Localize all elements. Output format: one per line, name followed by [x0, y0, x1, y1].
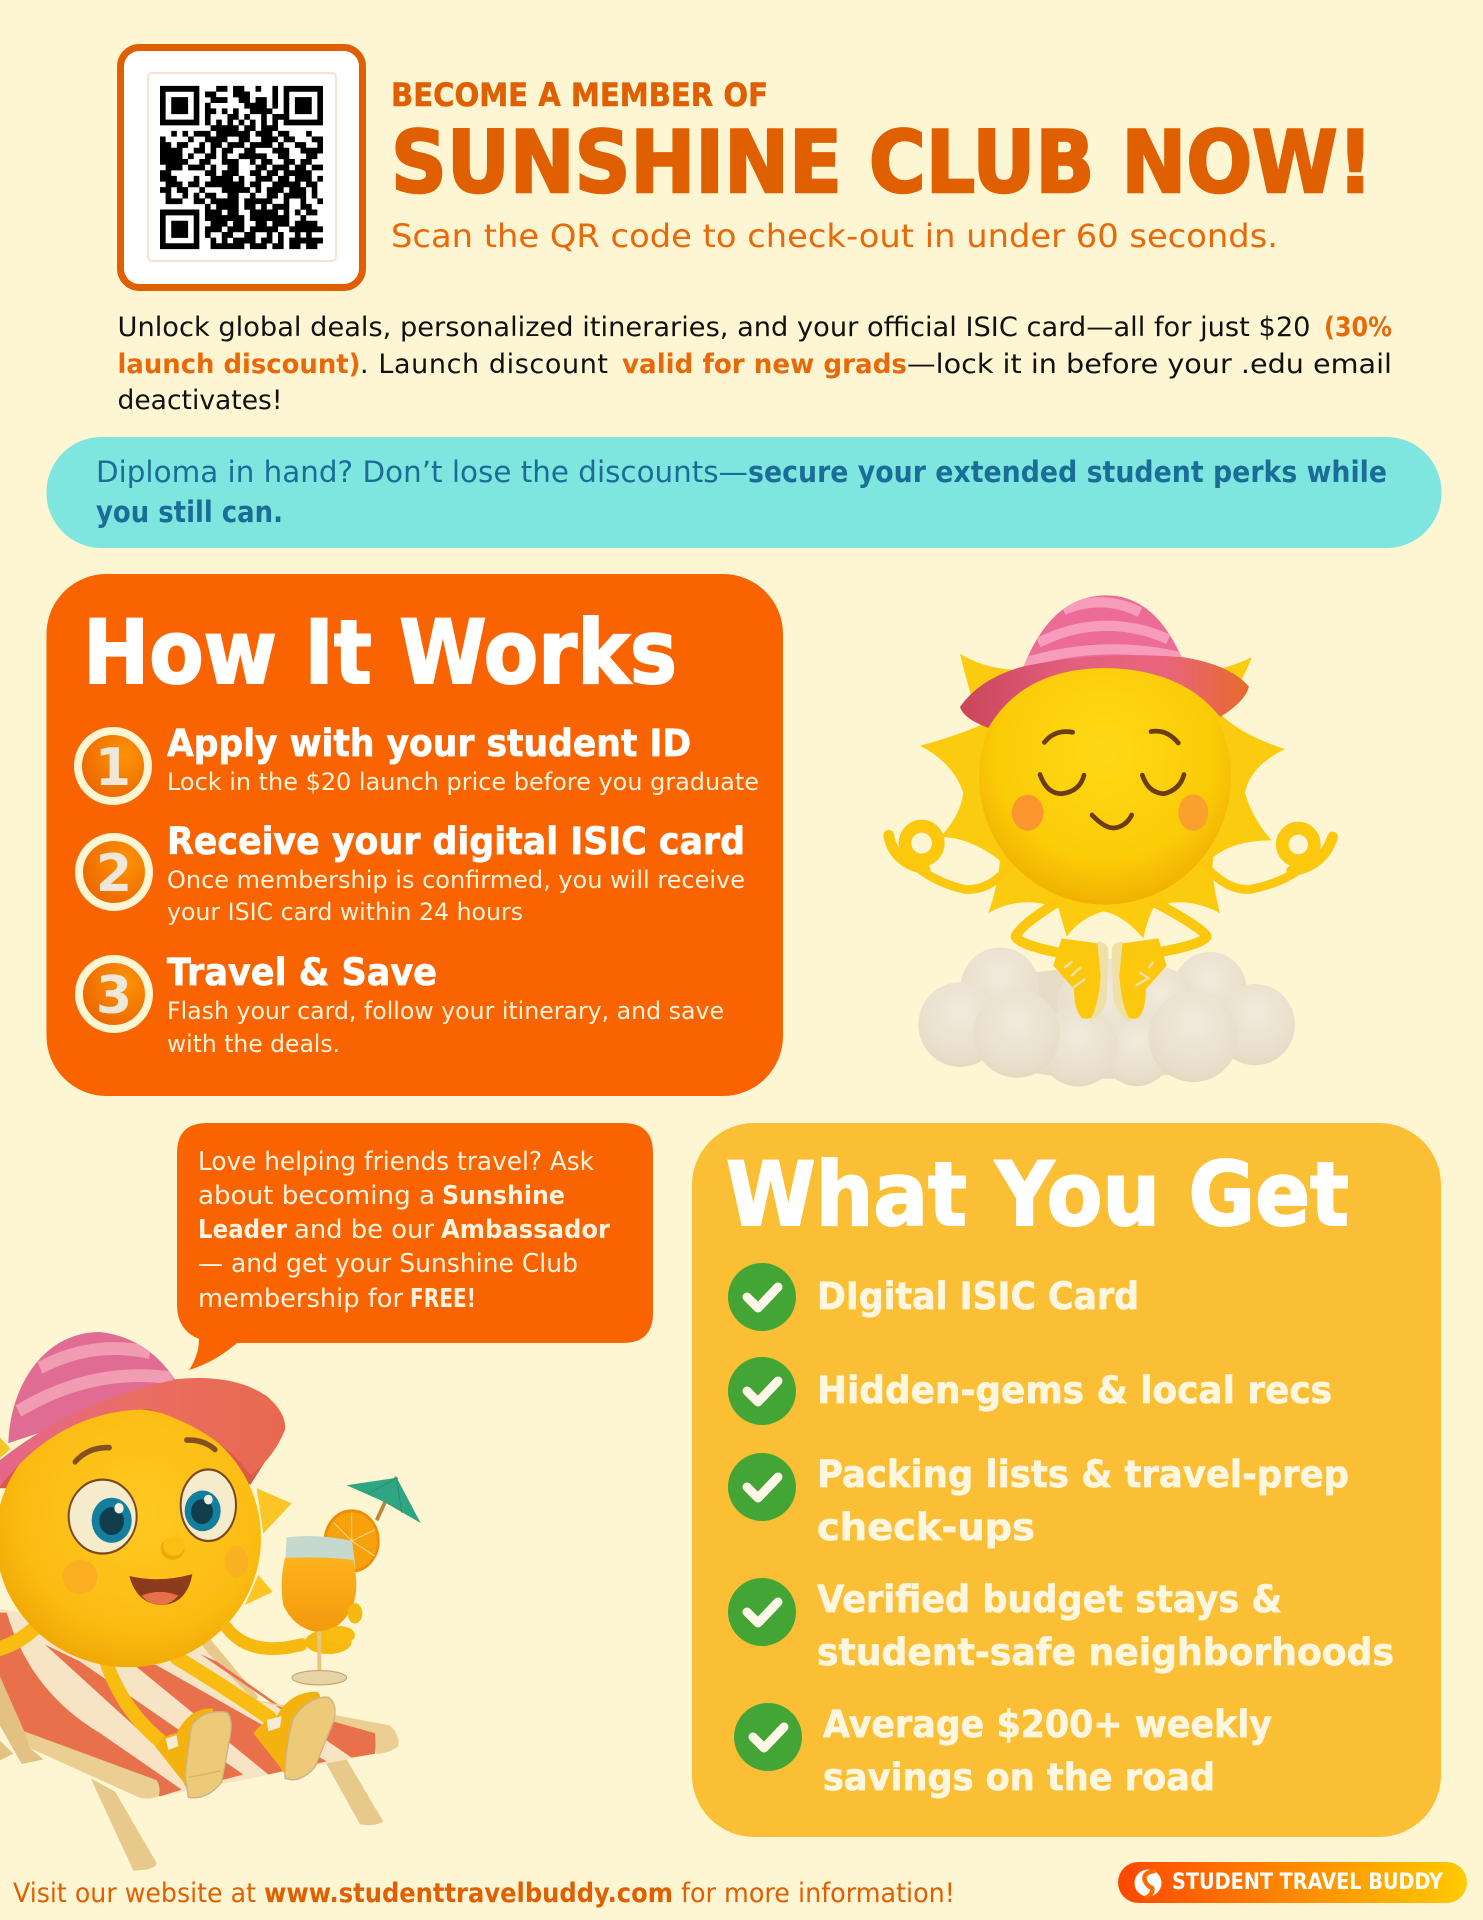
- speech bubble text: [198, 1147, 610, 1314]
- step 2 badge: [79, 837, 149, 907]
- header kicker: BECOME A MEMBER OF: [391, 76, 768, 114]
- step 3 badge: 3: [96, 966, 132, 1026]
- cocktail: [227, 1477, 421, 1685]
- banner text: secure your extended student perks while: [748, 455, 1387, 489]
- brand logo: [1134, 1870, 1162, 1898]
- step 3 text: with the deals.: [167, 1030, 340, 1058]
- benefit 3: Packing lists & travel-prep: [817, 1453, 1349, 1496]
- legs: [0, 1624, 270, 1741]
- benefit 3: check-ups: [817, 1506, 1035, 1549]
- benefit 2: [728, 1357, 1332, 1425]
- speech bubble text: and be our: [294, 1215, 434, 1245]
- benefit 1: DIgital ISIC Card: [817, 1275, 1139, 1318]
- step 2 badge: 2: [96, 844, 132, 904]
- intro paragraph: . Launch discount: [360, 349, 608, 380]
- sun rays: [920, 654, 1285, 938]
- speech bubble text: — and get your Sunshine Club: [198, 1249, 578, 1279]
- subtitle: Scan the QR code to check-out in under 60 seconds.: [391, 217, 1278, 255]
- brand badge: [1118, 1862, 1467, 1903]
- banner text: you still can.: [96, 495, 283, 529]
- speech bubble text: membership for: [198, 1284, 403, 1314]
- benefit 5: [734, 1703, 1272, 1799]
- hat: [960, 595, 1249, 728]
- intro paragraph: deactivates!: [118, 385, 282, 416]
- footer website line: Visit our website at: [13, 1878, 256, 1909]
- QR code: [160, 89, 323, 246]
- callout banner: [46, 437, 1442, 548]
- step 2 text: [167, 820, 745, 926]
- intro paragraph: valid for new grads: [622, 349, 907, 380]
- benefit 5: Average $200+ weekly: [823, 1703, 1272, 1746]
- illustration: sun on deck chair with drink: [0, 1332, 421, 1871]
- footer website line: [13, 1878, 955, 1909]
- intro paragraph: Unlock global deals, personalized itineraries, and your official ISIC card—all for just $20: [118, 312, 1310, 343]
- step 3 text: [167, 951, 724, 1058]
- speech bubble text: Love helping friends travel? Ask: [198, 1147, 594, 1177]
- illustration: meditating sun on cloud: [889, 595, 1333, 1086]
- speech bubble text: Sunshine: [442, 1181, 565, 1211]
- face: [1012, 731, 1208, 831]
- footer website line: for more information!: [681, 1878, 955, 1909]
- intro paragraph: —lock it in before your .edu email: [907, 349, 1392, 380]
- step 2 text: Receive your digital ISIC card: [167, 820, 745, 863]
- heading: what you get: What You Get: [726, 1143, 1349, 1246]
- shoes: [1053, 938, 1167, 1022]
- benefit 4: [728, 1578, 1394, 1674]
- panel: what you get: [692, 1123, 1441, 1837]
- speech bubble text: about becoming a: [198, 1181, 435, 1211]
- benefit 5: savings on the road: [823, 1756, 1215, 1799]
- panel: how it works: [46, 574, 783, 1096]
- banner text: [96, 455, 1387, 529]
- step 2 text: your ISIC card within 24 hours: [167, 898, 523, 926]
- eyes: [69, 1469, 236, 1553]
- cloud: [918, 948, 1295, 1086]
- benefit 4: Verified budget stays &: [817, 1578, 1282, 1621]
- step 2 text: Once membership is confirmed, you will receive: [167, 866, 745, 894]
- benefit 4: student-safe neighborhoods: [817, 1631, 1394, 1674]
- benefit 3: [728, 1453, 1349, 1549]
- under brim: [0, 1402, 285, 1488]
- step 1 badge: [78, 731, 148, 801]
- main title: SUNSHINE CLUB NOW!: [391, 113, 1373, 213]
- brows, nose, mouth, cheeks: [63, 1440, 248, 1605]
- rays: [0, 1437, 292, 1605]
- benefit 2: Hidden-gems & local recs: [817, 1369, 1332, 1412]
- arms, hands and legs: [889, 826, 1333, 954]
- shoes: [155, 1692, 335, 1798]
- intro paragraph: launch discount): [118, 349, 360, 380]
- deck chair: [0, 1609, 399, 1871]
- step 1 text: Apply with your student ID: [167, 722, 691, 765]
- step 3 text: Flash your card, follow your itinerary, and save: [167, 997, 724, 1025]
- step 1 text: [167, 722, 759, 796]
- speech bubble: [177, 1123, 653, 1370]
- hat: [0, 1332, 285, 1486]
- benefit 1: [728, 1263, 1139, 1331]
- QR code card: [120, 48, 362, 288]
- step 1 badge: 1: [95, 738, 131, 798]
- speech bubble text: Ambassador: [441, 1215, 610, 1245]
- intro paragraph: [118, 312, 1392, 416]
- brand name: STUDENT TRAVEL BUDDY: [1172, 1870, 1444, 1895]
- step 3 badge: [79, 959, 149, 1029]
- speech bubble text: Leader: [198, 1215, 287, 1245]
- heading: how it works: How It Works: [83, 601, 677, 704]
- footer website line: www.studenttravelbuddy.com: [264, 1878, 673, 1909]
- speech bubble text: FREE!: [410, 1284, 476, 1314]
- banner text: Diploma in hand? Don’t lose the discounts—: [96, 455, 748, 489]
- sun body: [0, 1409, 261, 1667]
- step 1 text: Lock in the $20 launch price before you graduate: [167, 768, 759, 796]
- arm holding glass: [227, 1628, 302, 1649]
- intro paragraph: (30%: [1324, 312, 1392, 343]
- step 3 text: Travel & Save: [167, 951, 437, 994]
- sun body: [979, 649, 1231, 905]
